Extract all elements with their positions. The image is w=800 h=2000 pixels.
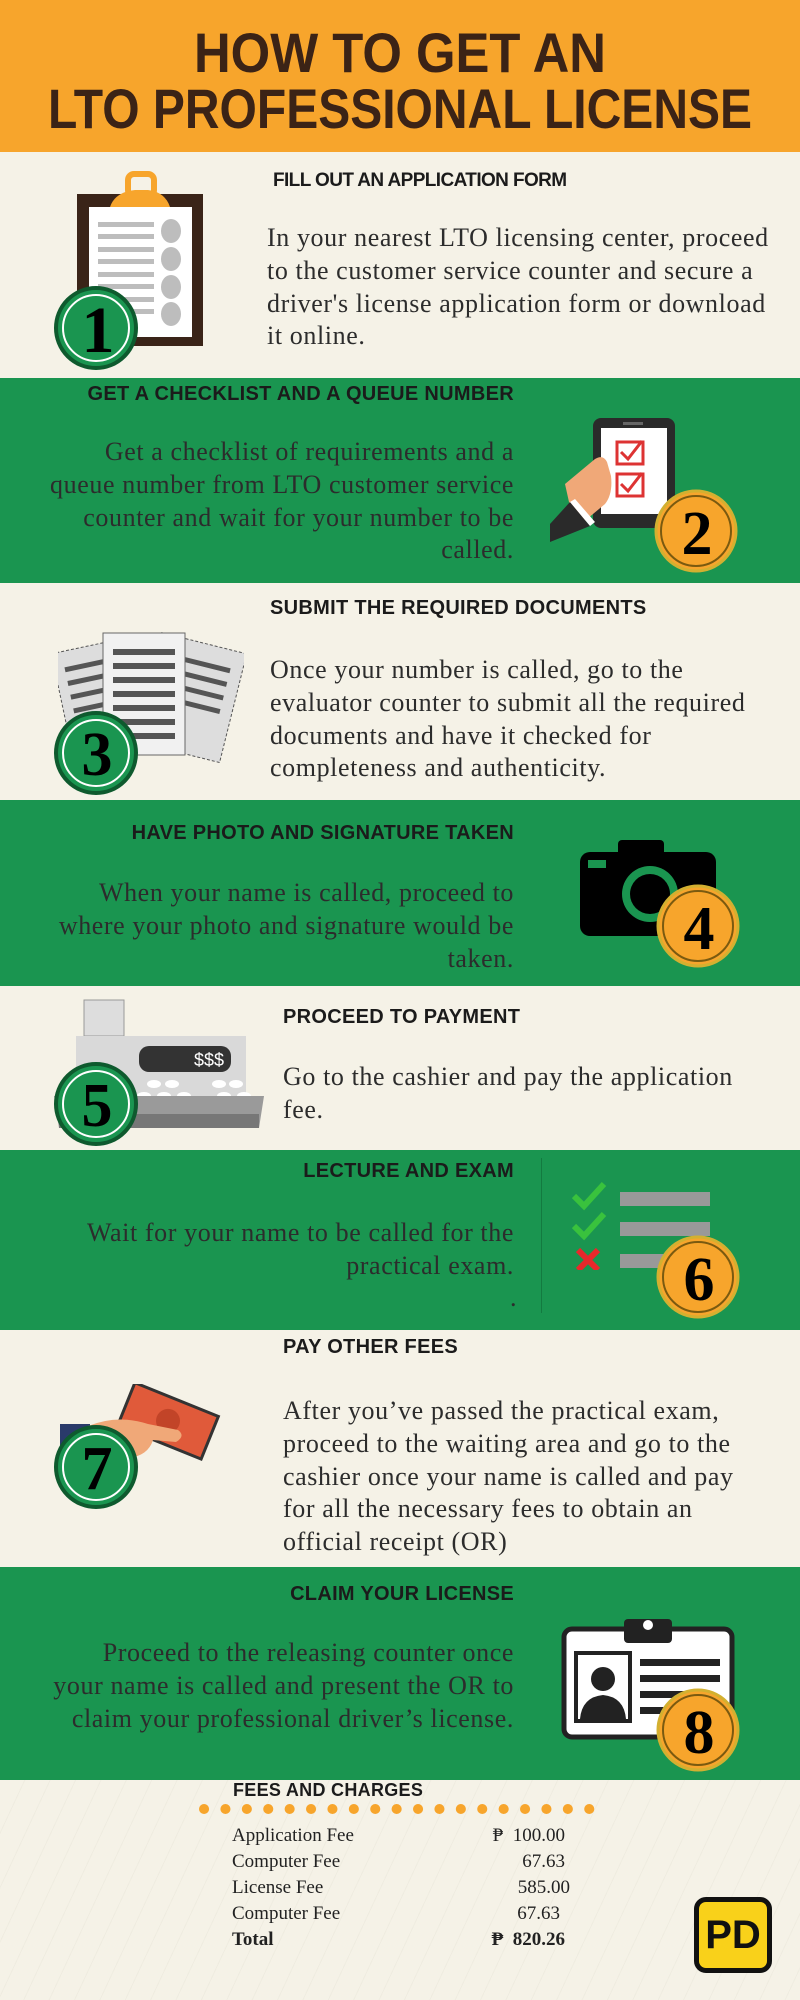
text: step 8: your name is called and present the OR to: [53, 1671, 514, 1700]
text: step 6: Wait for your name to be called for the: [87, 1218, 514, 1247]
heading: step 3: SUBMIT THE REQUIRED DOCUMENTS: [270, 597, 646, 619]
icon: documents: [58, 632, 244, 763]
panel: step 8: [0, 1567, 800, 1780]
icon: camera: [580, 840, 716, 936]
fees table: 585.00: [518, 1877, 570, 1898]
badge 1: 1: [82, 294, 114, 367]
fees table: Application Fee: [232, 1825, 354, 1846]
badge 6: [656, 1236, 740, 1318]
logo: PD: PD: [705, 1913, 761, 1957]
logo: PD: [694, 1897, 772, 1973]
badge 7: [54, 1425, 138, 1509]
text: step 8: Proceed to the releasing counter once: [103, 1638, 514, 1667]
badge 3: [54, 711, 138, 795]
title: [48, 21, 752, 140]
header banner: [0, 0, 800, 152]
text: step 4: taken.: [448, 944, 514, 973]
text: step 5: [283, 1062, 733, 1124]
fees table: 67.63: [522, 1851, 565, 1872]
text: step 7: proceed to the waiting area and go to the: [283, 1429, 731, 1458]
badge 1: [54, 286, 138, 370]
title: HOW TO GET AN: [194, 21, 606, 84]
heading: step 4: HAVE PHOTO AND SIGNATURE TAKEN: [132, 822, 514, 844]
fees table: 67.63: [517, 1903, 560, 1924]
fees table: Computer Fee: [232, 1851, 340, 1872]
text: step 2: [50, 437, 514, 564]
text: step 4: [58, 878, 514, 973]
panel: fees and charges: [0, 1780, 800, 2000]
panel: step 7: [0, 1330, 800, 1567]
text: step 8: [53, 1638, 514, 1733]
text: step 5: Go to the cashier and pay the application: [283, 1062, 733, 1091]
panel: step 5: [0, 986, 800, 1150]
text: step 2: counter and wait for your number to be: [83, 503, 514, 532]
icon: ID card: [562, 1619, 734, 1740]
icon: hand with money: [60, 1384, 220, 1461]
fees table: Computer Fee: [232, 1903, 340, 1924]
text: step 4: where your photo and signature would be: [59, 911, 514, 940]
text: step 1: [267, 223, 769, 350]
icon: clipboard: [77, 171, 203, 346]
badge 4: [656, 884, 740, 968]
icon: phone with hand: [550, 418, 675, 542]
text: step 8: claim your professional driver’s license.: [72, 1704, 514, 1733]
panel: step 3: [0, 583, 800, 800]
heading: step 7: PAY OTHER FEES: [283, 1336, 458, 1358]
dotted divider: [199, 1804, 594, 1814]
fees table: License Fee: [232, 1877, 323, 1898]
text: step 5: fee.: [283, 1095, 324, 1124]
panel: step 6: [0, 1150, 800, 1330]
icon: cash register: [54, 1000, 264, 1128]
text: step 6: [87, 1218, 514, 1280]
badge 8: 8: [684, 1699, 714, 1767]
text: step 7: cashier once your name is called and pay: [283, 1462, 734, 1491]
heading: step 2: GET A CHECKLIST AND A QUEUE NUMBER: [88, 383, 514, 405]
text: step 1: driver's license application form or download: [267, 289, 766, 318]
fees table: ₱ 820.26: [492, 1929, 565, 1950]
text: step 2: Get a checklist of requirements and a: [105, 437, 514, 466]
fees table: [232, 1825, 570, 1950]
heading: step 6: LECTURE AND EXAM: [303, 1160, 514, 1182]
badge 4: 4: [684, 895, 714, 963]
icon: checklist: [572, 1182, 710, 1270]
text: step 7: official receipt (OR): [283, 1527, 507, 1556]
badge 3: 3: [82, 721, 112, 789]
heading: fees: FEES AND CHARGES: [233, 1780, 423, 1800]
text: step 3: documents and have it checked for: [270, 721, 652, 750]
badge 2: 2: [682, 500, 712, 568]
text: step 3: evaluator counter to submit all the required: [270, 688, 745, 717]
heading: step 5: PROCEED TO PAYMENT: [283, 1006, 520, 1028]
text: step 6: practical exam.: [346, 1251, 514, 1280]
heading: step 8: CLAIM YOUR LICENSE: [290, 1583, 514, 1605]
fees table: ₱ 100.00: [493, 1825, 565, 1846]
text: step 7: for all the necessary fees to obtain an: [283, 1494, 693, 1523]
icon: cash register: $$$: [194, 1050, 224, 1070]
text: step 4: When your name is called, proceed to: [99, 878, 514, 907]
text: step 3: Once your number is called, go to the: [270, 655, 684, 684]
panel: step 4: [0, 800, 800, 986]
text: stray dot: .: [510, 1283, 517, 1312]
text: step 3: completeness and authenticity.: [270, 753, 606, 782]
panel: step 1: [0, 152, 800, 378]
fees table: Total: [232, 1929, 274, 1950]
text: step 1: In your nearest LTO licensing center, proceed: [267, 223, 769, 252]
badge 6: 6: [684, 1246, 714, 1314]
text: step 1: it online.: [267, 321, 365, 350]
text: step 2: queue number from LTO customer service: [50, 470, 514, 499]
badge 8: [656, 1688, 740, 1772]
text: step 2: called.: [441, 535, 514, 564]
badge 5: [54, 1062, 138, 1146]
panel: step 2: [0, 378, 800, 583]
text: step 1: to the customer service counter and secure a: [267, 256, 753, 285]
badge 2: [654, 490, 738, 572]
heading: step 1: FILL OUT AN APPLICATION FORM: [273, 170, 567, 191]
text: step 7: [283, 1396, 734, 1556]
text: step 7: After you’ve passed the practical exam,: [283, 1396, 719, 1425]
text: step 3: [270, 655, 745, 782]
badge 7: 7: [82, 1435, 112, 1503]
badge 5: 5: [82, 1072, 112, 1140]
